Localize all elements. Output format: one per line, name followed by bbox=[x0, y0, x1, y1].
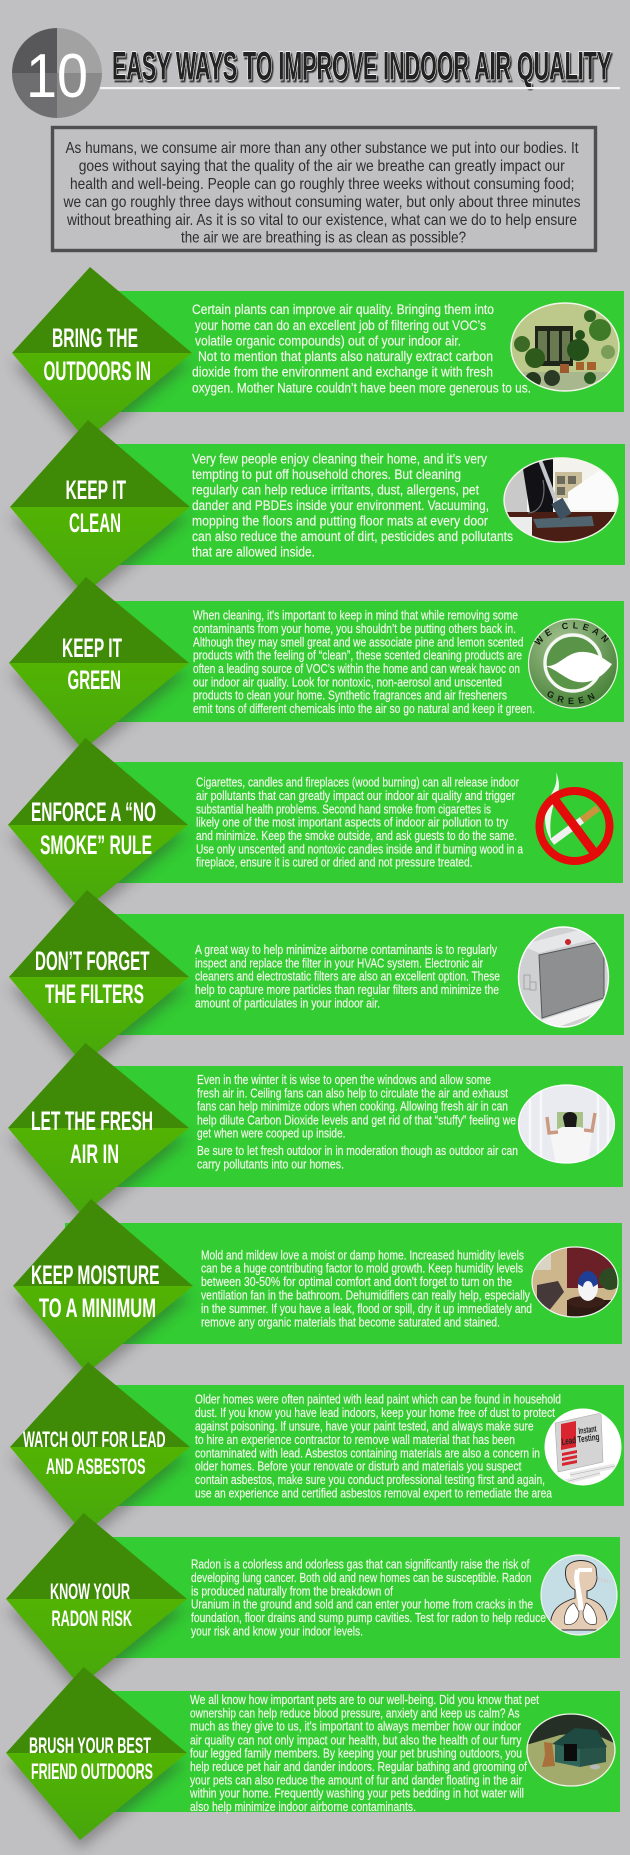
body text: Be sure to let fresh outdoor in in moderation though as outdoor air can bbox=[197, 1143, 518, 1158]
icon: we clean green badge: WE CLEAN bbox=[534, 622, 609, 645]
diamond bbox=[6, 1513, 187, 1686]
heading: ENFORCE A “NO bbox=[31, 797, 156, 827]
green text bar bbox=[68, 1691, 620, 1812]
body text: cleaners and electrostatic filters are also an excellent option. These bbox=[195, 969, 500, 984]
body text: your home can do an excellent job of filtering out VOC’s bbox=[195, 318, 486, 334]
heading: FRIEND OUTDOORS bbox=[31, 1759, 153, 1784]
body text: substantial health problems. Second hand smoke from cigarettes is bbox=[196, 801, 491, 816]
icon: no smoking sign bbox=[540, 772, 610, 861]
heading bbox=[50, 1579, 132, 1631]
heading: BRING THE bbox=[52, 323, 138, 353]
body text: emit tons of different chemicals into the air so go natural and keep it green. bbox=[193, 701, 535, 716]
header badge: number 10: 10 bbox=[26, 42, 88, 111]
body text: Even in the winter it is wise to open the windows and allow some bbox=[197, 1072, 491, 1087]
green text bar bbox=[65, 1223, 622, 1344]
icon: lungs diagram bbox=[540, 1555, 618, 1636]
heading bbox=[35, 946, 150, 1009]
panel: 2 keep it clean bbox=[10, 420, 625, 603]
body text: get when were cooped up inside. bbox=[197, 1126, 346, 1141]
body text: Although they may smell great and we associate pine and lemon scented bbox=[193, 634, 524, 649]
panel: 5 don't forget the filters bbox=[9, 890, 624, 1073]
body text: four legged family members. By keeping your pet brushing outdoors, you bbox=[190, 1746, 522, 1761]
body text: foundation, floor drains and sump pump cavities. Test for radon to help reduce bbox=[191, 1610, 546, 1625]
heading bbox=[31, 1260, 160, 1323]
panel: 10 brush your best friend outdoors bbox=[6, 1667, 620, 1849]
body text bbox=[201, 1247, 532, 1329]
body text: older homes. Before your renovate or disturb and materials you suspect bbox=[195, 1459, 522, 1474]
body text: contaminated with lead. Asbestos containing materials are also a concern in bbox=[195, 1445, 540, 1460]
body text: carry pollutants into our homes. bbox=[197, 1156, 344, 1171]
body text: dioxide from the environment and exchange it with fresh bbox=[192, 365, 493, 381]
body text: When cleaning, it's important to keep in mind that while removing some bbox=[193, 608, 518, 623]
green text bar bbox=[70, 1066, 623, 1187]
body text bbox=[197, 1072, 518, 1171]
diamond bbox=[10, 420, 190, 594]
heading: TO A MINIMUM bbox=[39, 1293, 156, 1323]
body text: products with the feeling of “clean”, these scented cleaning products are bbox=[193, 648, 522, 663]
green text bar bbox=[68, 1537, 620, 1658]
icon: dog and doghouse bbox=[526, 1712, 616, 1787]
body text: help to capture more particles than regular filters and minimize the bbox=[195, 982, 499, 997]
panel: 1 bring the outdoors in bbox=[12, 267, 624, 449]
body text: Radon is a colorless and odorless gas that can significantly raise the risk of bbox=[191, 1556, 530, 1571]
heading bbox=[23, 1427, 166, 1479]
body text: dander and PBDEs inside your environment. Vacuuming, bbox=[192, 498, 489, 514]
heading bbox=[66, 475, 126, 538]
body text: inspect and replace the filter in your HVAC system. Electronic air bbox=[195, 955, 484, 970]
body text: Uranium in the ground and sold and can enter your home from cracks in the bbox=[191, 1597, 533, 1612]
intro text box: goes without saying that the quality of the air we breathe can greatly impact our bbox=[79, 158, 565, 175]
body text: ownership can help reduce blood pressure, anxiety and keep us calm? As bbox=[190, 1705, 520, 1720]
diamond bbox=[8, 738, 188, 912]
body text bbox=[189, 1692, 539, 1814]
body text: Mold and mildew love a moist or damp home. Increased humidity levels bbox=[201, 1247, 524, 1262]
heading: SMOKE” RULE bbox=[40, 830, 152, 860]
intro text box bbox=[52, 128, 596, 250]
body text: fans can help minimize odors when cooking. Allowing fresh air in can bbox=[197, 1099, 508, 1114]
icon: instant lead testing kit: Instant bbox=[578, 1424, 597, 1436]
green text bar bbox=[71, 914, 624, 1035]
body text: our indoor air quality. Look for nontoxic, non-aerosol and unscented bbox=[193, 674, 502, 689]
body text: A great way to help minimize airborne contaminants is to regularly bbox=[195, 942, 497, 957]
body text: Cigarettes, candles and fireplaces (wood burning) can all release indoor bbox=[196, 775, 520, 790]
body text: tempting to put off household chores. But cleaning bbox=[192, 467, 461, 483]
body text bbox=[195, 1392, 561, 1500]
heading bbox=[62, 633, 122, 695]
body text: developing lung cancer. Both old and new homes can be susceptible. Radon bbox=[191, 1570, 532, 1585]
body text: air quality can not only impact our health, but also the health of our furry bbox=[190, 1732, 522, 1747]
body text: within your home. Frequently washing your pets bedding in hot water will bbox=[189, 1786, 524, 1801]
icon: dehumidifier in living room bbox=[531, 1246, 621, 1318]
heading bbox=[31, 797, 156, 860]
panel: 4 enforce a no smoke rule bbox=[8, 738, 623, 921]
panel: 3 keep it green bbox=[9, 577, 624, 754]
body text: your risk and know your indoor levels. bbox=[191, 1623, 363, 1638]
icon: vacuuming bbox=[503, 457, 619, 543]
body text: products to clean your home. Synthetic fragrances and air fresheners bbox=[193, 688, 507, 703]
body text: amount of particulates in your indoor air. bbox=[195, 995, 380, 1010]
heading: OUTDOORS IN bbox=[44, 356, 151, 386]
body text: help reduce pet hair and dander indoors. Regular bathing and grooming of bbox=[190, 1759, 527, 1774]
heading: RADON RISK bbox=[52, 1606, 132, 1631]
icon: woman opening curtains bbox=[518, 1085, 615, 1165]
body text: Not to mention that plants also naturally extract carbon bbox=[198, 349, 493, 365]
body text: often a leading source of VOC’s within the home and can wreak havoc on bbox=[193, 661, 520, 676]
body text: We all know how important pets are to our well-being. Did you know that pet bbox=[190, 1692, 539, 1707]
diamond bbox=[12, 267, 192, 440]
body text: air pollutants that can greatly impact our indoor air quality and trigger bbox=[196, 788, 516, 803]
green text bar bbox=[74, 291, 624, 412]
body text: ventilation fan in the bathroom. Dehumidifiers can really help, especially bbox=[201, 1288, 530, 1303]
body text: can also reduce the amount of dirt, pesticides and pollutants bbox=[192, 529, 513, 545]
body text: between 30-50% for optimal comfort and don't forget to turn on the bbox=[201, 1274, 512, 1289]
green text bar bbox=[72, 1385, 624, 1506]
body text: and minimize. Keep the smoke outside, and ask guests to do the same. bbox=[196, 828, 517, 843]
intro text box: the air we are breathing is as clean as possible? bbox=[181, 230, 466, 246]
panel: 8 watch out for lead and asbestos bbox=[10, 1362, 624, 1543]
body text: Very few people enjoy cleaning their home, and it’s very bbox=[192, 451, 488, 467]
body text: help dilute Carbon Dioxide levels and get rid of that “stuffy” feeling we bbox=[197, 1112, 516, 1127]
heading: WATCH OUT FOR LEAD bbox=[23, 1427, 166, 1452]
heading: DON’T FORGET bbox=[35, 946, 150, 976]
body text bbox=[195, 942, 500, 1010]
heading: GREEN bbox=[68, 665, 121, 695]
body text: mopping the floors and putting floor mats at every door bbox=[192, 514, 488, 530]
body text: fresh air in. Ceiling fans can also help to circulate the air and exhaust bbox=[197, 1085, 508, 1100]
heading: LET THE FRESH bbox=[31, 1106, 153, 1136]
body text bbox=[191, 1556, 546, 1638]
body text bbox=[193, 608, 535, 716]
body text: to hire an experience contractor to remove wall material that has been bbox=[195, 1432, 515, 1447]
diamond bbox=[6, 1667, 187, 1840]
icon: instant lead testing kit: Lead Testing bbox=[561, 1432, 600, 1448]
header badge: number 10 bbox=[12, 28, 102, 118]
body text bbox=[196, 775, 524, 870]
heading bbox=[44, 323, 151, 386]
body text: also help minimize indoor airborne contaminants. bbox=[190, 1799, 416, 1814]
panel: 6 let the fresh air in bbox=[8, 1043, 623, 1224]
body text: contaminants from your home, you shouldn’t be putting others back in. bbox=[193, 621, 516, 636]
heading: KEEP MOISTURE bbox=[31, 1260, 160, 1290]
green text bar bbox=[71, 601, 624, 722]
heading: BRUSH YOUR BEST bbox=[29, 1733, 151, 1758]
heading: THE FILTERS bbox=[45, 979, 144, 1009]
green text bar bbox=[72, 444, 625, 565]
icon: we clean green badge: GREEN bbox=[547, 691, 595, 704]
heading: AIR IN bbox=[70, 1139, 119, 1169]
body text: regularly can help reduce irritants, dust, allergens, pet bbox=[192, 482, 479, 498]
icon: instant lead testing kit bbox=[545, 1409, 621, 1486]
body text bbox=[192, 302, 531, 396]
diamond bbox=[10, 1362, 190, 1534]
body text: your pets can also reduce the amount of fur and dander floating in the air bbox=[190, 1772, 523, 1787]
heading: CLEAN bbox=[69, 508, 121, 538]
body text: Use only unscented and nontoxic candles inside and if burning wood in a bbox=[196, 841, 524, 856]
body text: volatile organic compounds) out of your indoor air. bbox=[195, 334, 461, 350]
icon: plant-filled room bbox=[510, 302, 620, 392]
icon: we clean green badge bbox=[528, 618, 618, 709]
diamond bbox=[8, 1043, 189, 1215]
body text: remove any organic materials that become saturated and stained. bbox=[201, 1314, 500, 1329]
diamond bbox=[9, 890, 189, 1064]
heading: KNOW YOUR bbox=[50, 1579, 130, 1604]
panel: 9 know your radon risk bbox=[6, 1513, 620, 1695]
body text: oxygen. Mother Nature couldn’t have been more generous to us. bbox=[192, 380, 531, 396]
body text: fireplace, ensure it is cured or dried and not pressure treated. bbox=[196, 855, 472, 870]
body text: is produced naturally from the breakdown of bbox=[191, 1583, 393, 1598]
body text: in the summer. If you have a leak, flood or spill, dry it up immediately and bbox=[201, 1301, 532, 1316]
heading bbox=[31, 1106, 153, 1169]
green text bar bbox=[70, 762, 623, 883]
heading: KEEP IT bbox=[62, 633, 122, 663]
body text: Certain plants can improve air quality. Bringing them into bbox=[192, 302, 494, 318]
body text: likely one of the most important aspects of indoor air pollution to try bbox=[196, 815, 508, 830]
heading: AND ASBESTOS bbox=[46, 1454, 146, 1479]
heading: KEEP IT bbox=[66, 475, 126, 505]
panel: 7 keep moisture to a minimum bbox=[13, 1199, 622, 1382]
body text: contain asbestos, make sure you conduct professional testing first and again, bbox=[195, 1472, 545, 1487]
body text bbox=[192, 451, 513, 561]
body text: can be a huge contributing factor to mold growth. Keep humidity levels bbox=[201, 1261, 523, 1276]
body text: much as they give to us, it's important to always member how our indoor bbox=[190, 1719, 522, 1734]
diamond bbox=[13, 1199, 193, 1373]
icon: air filter unit bbox=[518, 922, 610, 1030]
body text: that are allowed inside. bbox=[192, 545, 315, 561]
heading bbox=[29, 1733, 153, 1784]
body text: against poisoning. If unsure, have your paint tested, and always make sure bbox=[195, 1418, 534, 1433]
diamond bbox=[9, 577, 189, 750]
